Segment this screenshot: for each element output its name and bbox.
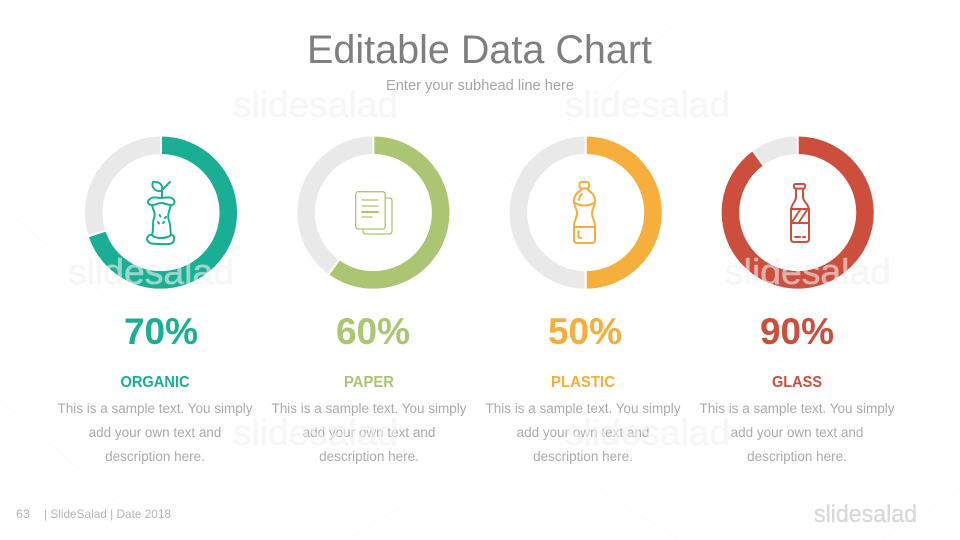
watermarks: slidesalad [565, 84, 730, 125]
panel: paper [271, 128, 467, 464]
heading: organic: ORGANIC [120, 374, 190, 391]
description: glass [699, 401, 895, 464]
watermarks: slidesalad [725, 251, 891, 292]
panel: glass [699, 128, 895, 464]
description: glass: description here. [747, 449, 847, 464]
description: paper: description here. [319, 449, 419, 464]
description: glass: This is a sample text. You simply [699, 401, 895, 416]
description: plastic: add your own text and [517, 425, 649, 440]
description: organic: description here. [105, 449, 205, 464]
footer: page number: 63 [16, 507, 30, 521]
donut chart: plastic 50% [518, 128, 653, 298]
panel: organic [57, 128, 253, 464]
description: organic: This is a sample text. You simply [57, 401, 253, 416]
watermarks: slidesalad [233, 84, 398, 125]
percentage: 70%: 70% [124, 311, 198, 352]
description: plastic: This is a sample text. You simply [485, 401, 681, 416]
description: paper: This is a sample text. You simply [271, 401, 467, 416]
donut chart: glass 90% [730, 128, 865, 280]
watermarks: slidesalad [68, 251, 234, 292]
panel: plastic [485, 128, 681, 464]
description: paper: add your own text and [303, 425, 435, 440]
title: Editable Data Chart [307, 28, 652, 72]
watermarks [68, 84, 891, 453]
heading: paper: PAPER [344, 374, 394, 391]
description: glass: add your own text and [731, 425, 863, 440]
watermarks: slidesalad [565, 412, 730, 453]
heading: plastic: PLASTIC [551, 374, 615, 391]
percentage: 90%: 90% [760, 311, 834, 352]
icon: plastic bottle [574, 182, 595, 243]
percentage: 60%: 60% [336, 311, 410, 352]
description: organic: add your own text and [89, 425, 221, 440]
watermarks: slidesalad [233, 412, 398, 453]
subhead: Enter your subhead line here [386, 78, 574, 94]
heading: glass: GLASS [772, 374, 822, 391]
footer: date label: | SlideSalad | Date 2018 [44, 507, 171, 521]
icon: paper sheets [356, 192, 392, 234]
description: organic [57, 401, 253, 464]
percentage: 50%: 50% [548, 311, 622, 352]
icon: apple core [147, 182, 174, 244]
description: paper [271, 401, 467, 464]
donut chart: paper 60% [306, 128, 441, 281]
footer: logo: slidesalad [814, 501, 917, 528]
icon: glass bottle [791, 184, 809, 242]
donut chart: organic 70% [80, 128, 228, 280]
description: plastic [485, 401, 681, 464]
description: plastic: description here. [533, 449, 633, 464]
